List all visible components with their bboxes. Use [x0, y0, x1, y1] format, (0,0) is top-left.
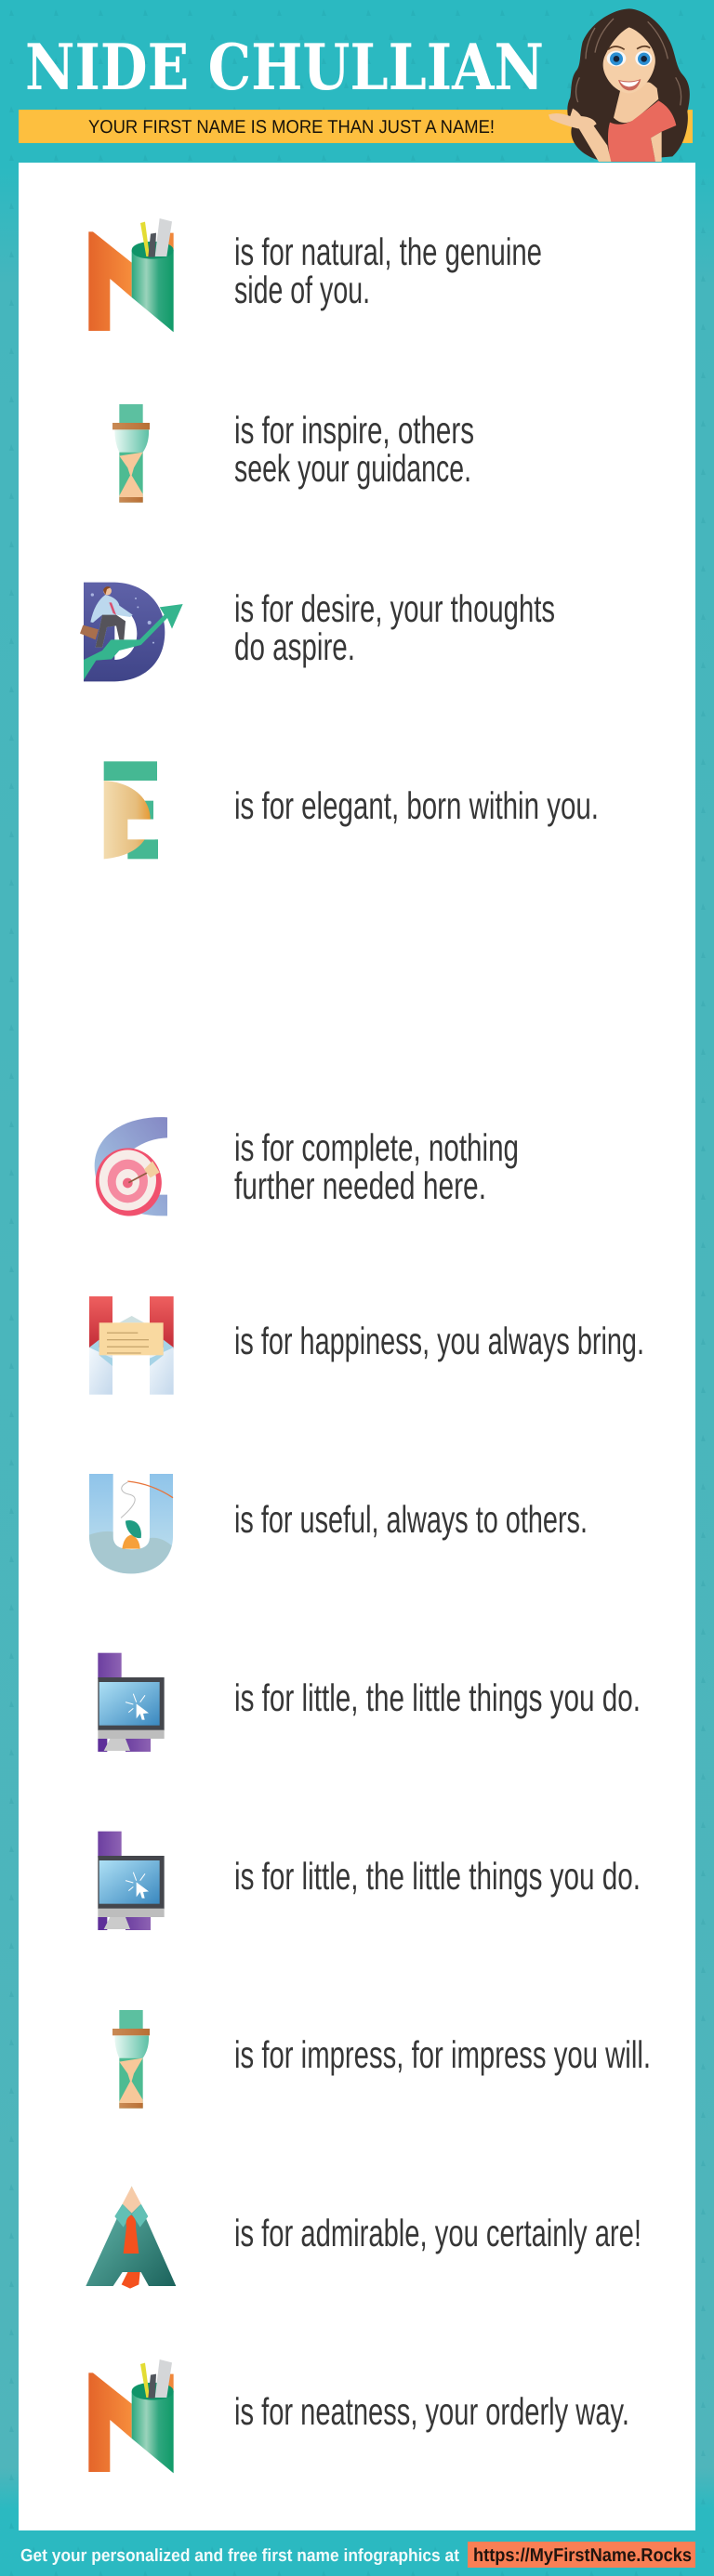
- icon: U fishing: [89, 1474, 173, 1573]
- row: N natural: [88, 218, 542, 332]
- footer text: Get your personalized and free first name infographics at: [20, 2546, 460, 2566]
- subtitle banner: [19, 110, 693, 143]
- text: seek your guidance.: [234, 447, 471, 490]
- text: side of you.: [234, 269, 370, 311]
- row: U useful: [89, 1474, 588, 1573]
- row: L little (second): [98, 1832, 641, 1930]
- illustration: woman presenting: [549, 8, 690, 162]
- row: A admirable: [86, 2187, 641, 2289]
- row: E elegant: [104, 761, 599, 859]
- icon: L computer monitor: [98, 1653, 165, 1752]
- subtitle banner: YOUR FIRST NAME IS MORE THAN JUST A NAME!: [88, 117, 495, 138]
- footer url badge: https://MyFirstName.Rocks: [473, 2545, 692, 2566]
- icon: L computer monitor: [98, 1832, 165, 1930]
- row: H happiness: [89, 1296, 644, 1395]
- row: L little: [98, 1653, 641, 1752]
- text: do aspire.: [234, 625, 355, 668]
- text: is for desire, your thoughts: [234, 587, 555, 630]
- footer: [20, 2542, 695, 2568]
- icon: H envelope: [89, 1296, 174, 1395]
- text: further needed here.: [234, 1164, 486, 1207]
- icon: C with target: [86, 1117, 171, 1226]
- row: I impress: [112, 2010, 651, 2109]
- row: I inspire: [112, 404, 474, 503]
- row: D desire: [80, 583, 555, 681]
- title: NIDE CHULLIAN: [25, 31, 544, 105]
- row: N neatness: [88, 2359, 629, 2473]
- icon: D with climbing businessman: [80, 583, 183, 681]
- text: is for natural, the genuine: [234, 230, 542, 273]
- row: C complete: [86, 1117, 519, 1226]
- icon: E with planet: [104, 761, 158, 859]
- text: is for inspire, others: [234, 409, 474, 452]
- icon: I hourglass: [112, 2010, 150, 2109]
- icon: N with pen holder: [88, 2359, 174, 2473]
- icon: A with suit and tie: [86, 2187, 176, 2289]
- icon: I hourglass: [112, 404, 150, 503]
- text: is for complete, nothing: [234, 1126, 519, 1169]
- icon: N with pen holder: [88, 218, 174, 332]
